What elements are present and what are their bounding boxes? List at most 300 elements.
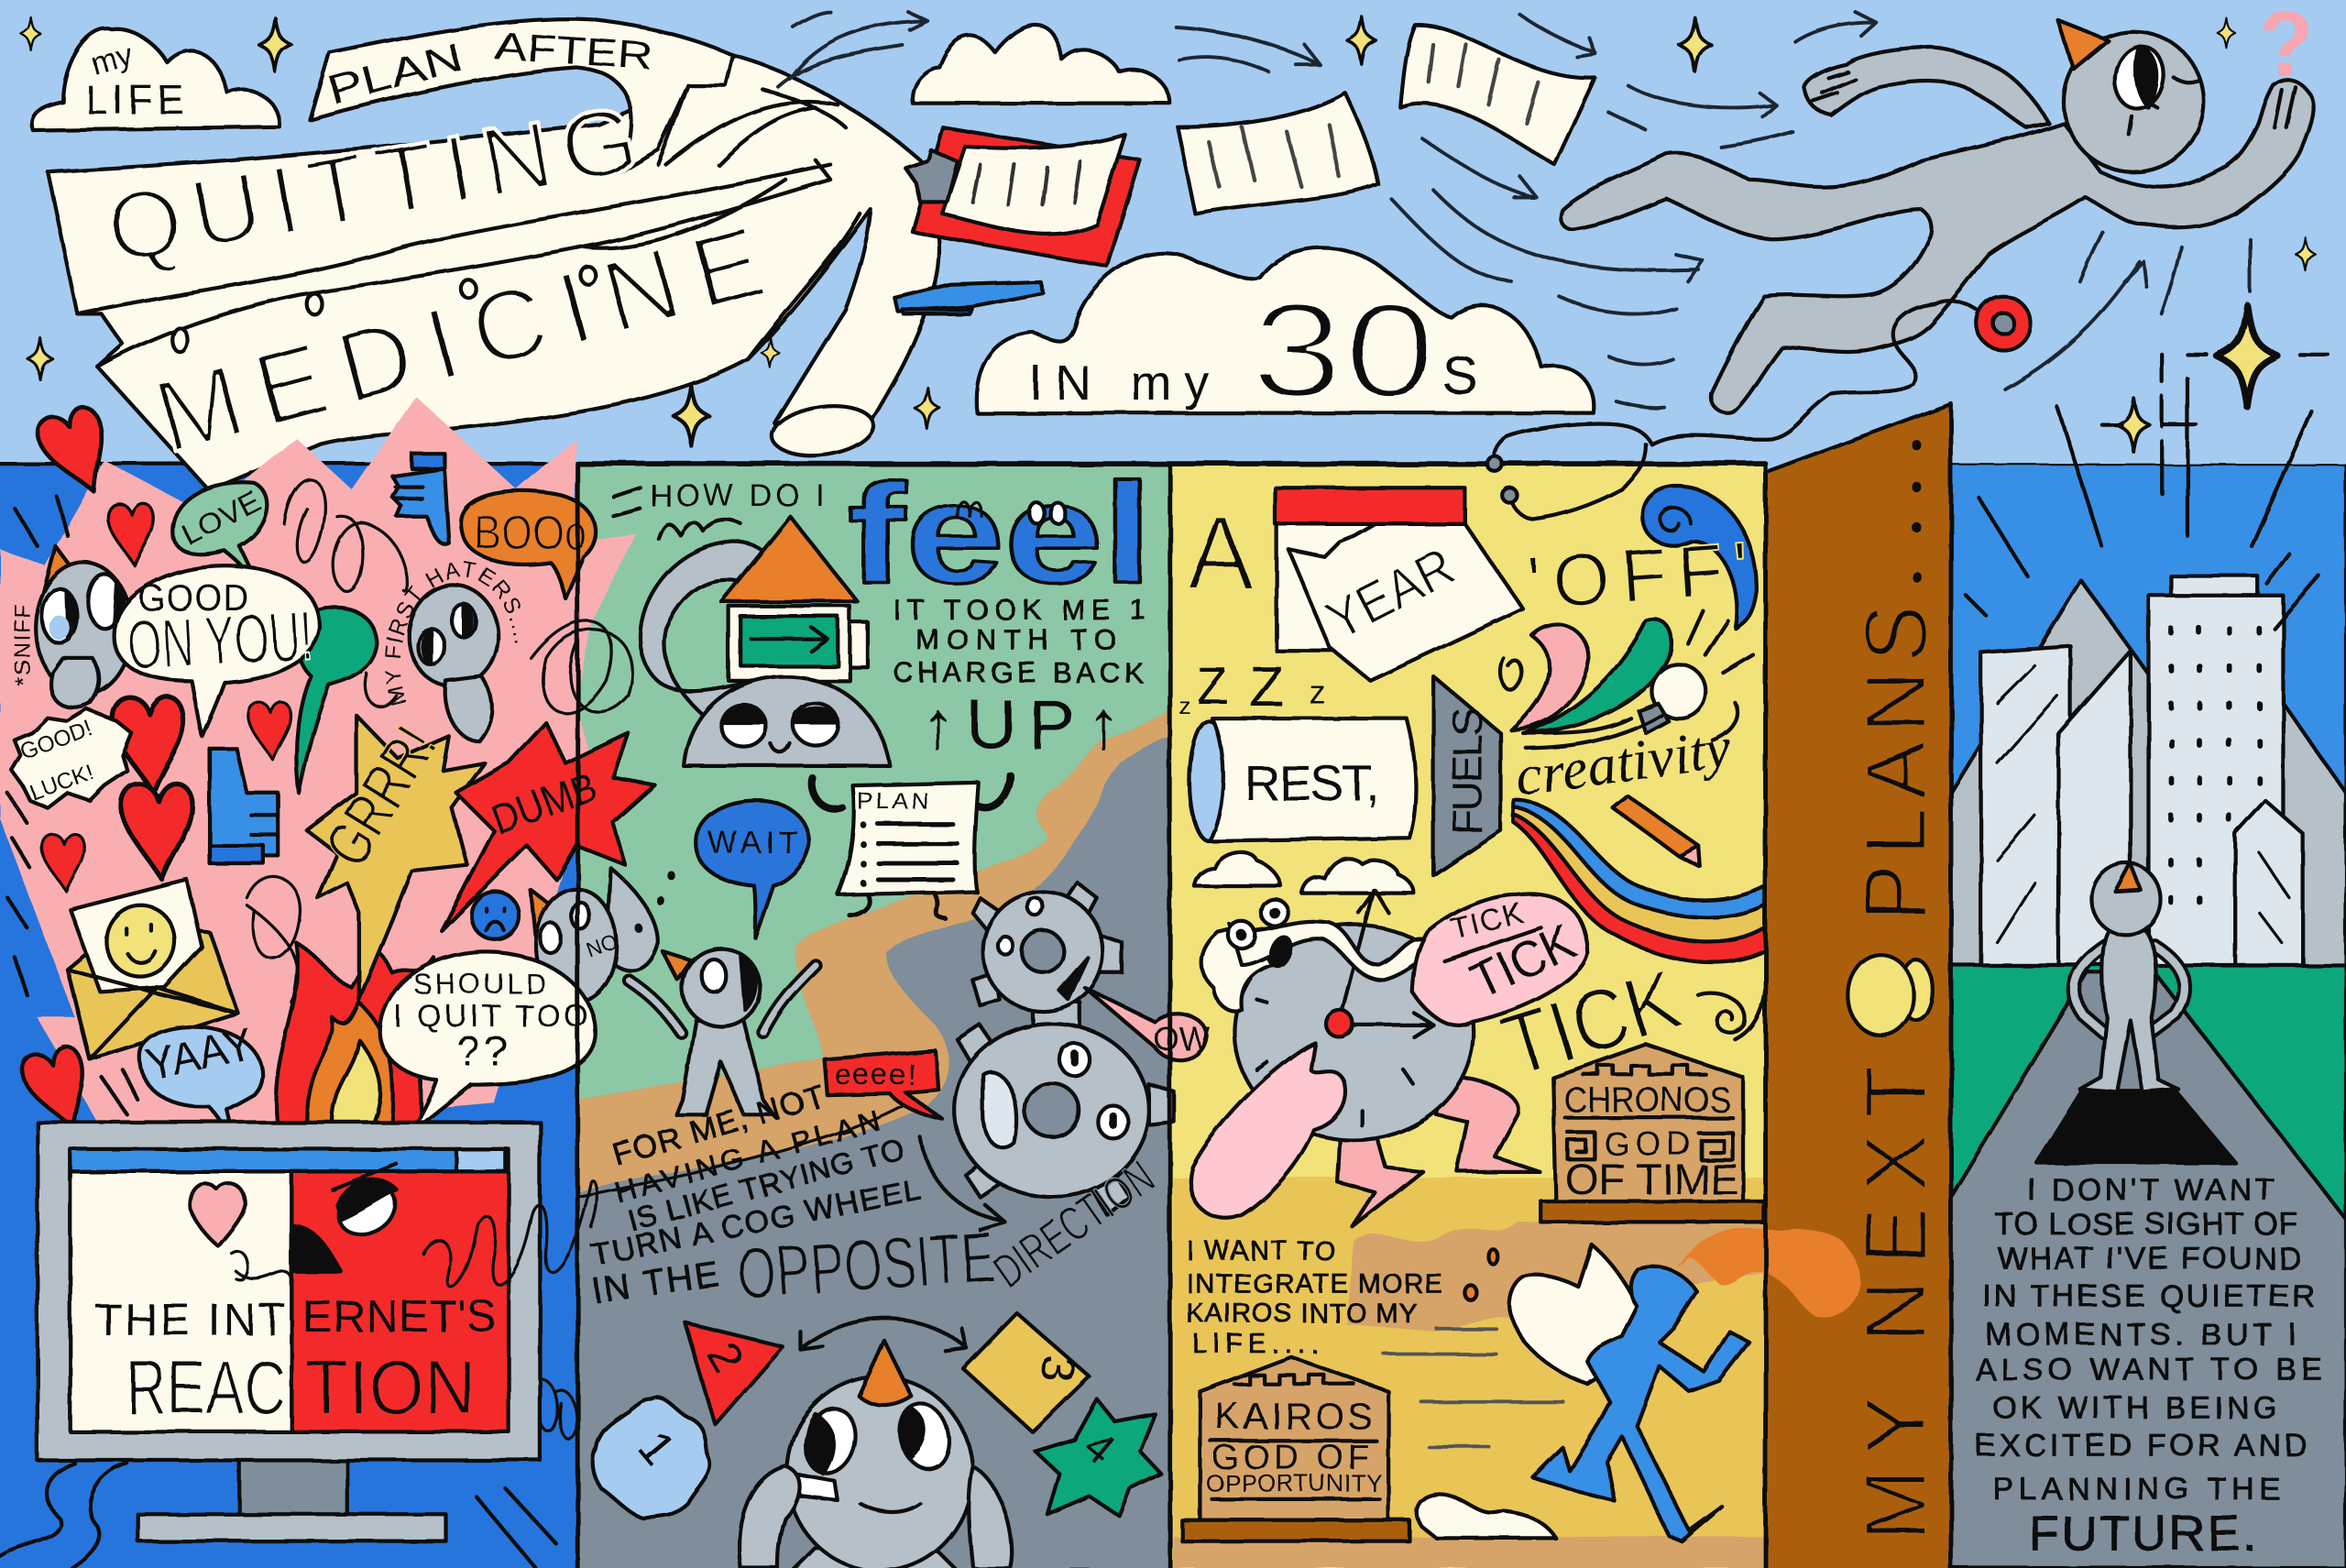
- tombstone: chronos: [1541, 1045, 1764, 1223]
- small cog: [972, 883, 1122, 1033]
- black shadow: [2036, 1091, 2235, 1163]
- eye: [2110, 43, 2168, 113]
- mouth: [740, 955, 756, 1010]
- scribble spirals: [247, 479, 632, 1439]
- cone: [859, 1341, 911, 1405]
- body: [1532, 1266, 1749, 1541]
- tick two: TICK: [1462, 913, 1584, 1009]
- pupils: [1074, 1053, 1113, 1125]
- feel second eye set: [1029, 503, 1065, 523]
- tick swirl: [1698, 988, 1766, 1040]
- eye: [1059, 1043, 1090, 1076]
- mouth: [1059, 958, 1088, 1000]
- eye left: [418, 629, 444, 664]
- no figure: NO: [583, 928, 620, 962]
- tube: [1494, 301, 1977, 520]
- pupil: [2136, 47, 2157, 108]
- the int: THE INT: [94, 1295, 286, 1344]
- the letter A: A: [1188, 496, 1254, 612]
- grrr star: [307, 714, 485, 1000]
- flying figure: [1561, 21, 2313, 413]
- body and legs: [1561, 80, 2313, 413]
- text: future note: OK WITH BEING: [1993, 1391, 2277, 1426]
- thumbs up: [210, 748, 279, 863]
- envelope back: [67, 920, 238, 1059]
- divider: [1444, 927, 1541, 960]
- pink heart: [190, 1183, 246, 1246]
- monitor shell: [38, 1122, 540, 1460]
- tall building: [2148, 596, 2283, 967]
- dirt pebbles: [1464, 1249, 1497, 1300]
- text: future note: I DON'T WANT: [2027, 1172, 2275, 1207]
- calendar: [1275, 488, 1523, 681]
- kairos: KAIROS: [1215, 1395, 1372, 1437]
- clock hand right: [1339, 1013, 1433, 1036]
- speech bubble: should I quit too: SHOULD: [413, 968, 548, 1000]
- battery shell: [729, 606, 850, 681]
- blue swirl: [1643, 486, 1757, 629]
- wings: [1509, 1245, 1644, 1384]
- thought dots: [639, 875, 672, 929]
- right pupil: [901, 1409, 925, 1459]
- fuels block: [1433, 676, 1501, 875]
- fire: [276, 943, 433, 1122]
- pink reaction burst: [0, 397, 636, 1122]
- kairos text: I WANT TO: [1187, 1236, 1336, 1266]
- plan word: PLAN: [858, 787, 932, 815]
- divider: [1211, 1441, 1379, 1499]
- meander: [1583, 1065, 1705, 1074]
- eye right: [893, 1398, 957, 1475]
- cog wheel text: OPPOSITE: [735, 1216, 997, 1314]
- speech bubble: love: [173, 483, 268, 587]
- tick tick hand: [1412, 894, 1587, 1025]
- diamond three: [963, 1313, 1090, 1431]
- smile: [2129, 78, 2199, 135]
- 30: 30: [1251, 276, 1436, 426]
- opportunity: OPPORTUNITY: [1206, 1470, 1383, 1497]
- panel: a year off: [1170, 464, 1766, 1568]
- chronos: CHRONOS: [1563, 1080, 1731, 1120]
- body: [955, 1024, 1149, 1197]
- horizon line: [577, 462, 1766, 466]
- speech bubble: should I quit too: ??: [456, 1027, 512, 1074]
- body: [2079, 930, 2178, 1092]
- big cog: [955, 1024, 1175, 1215]
- smile face: [106, 905, 175, 977]
- paper: [838, 783, 979, 894]
- sad blue face: [471, 892, 520, 939]
- text: future note: IN THESE QUIETER: [1982, 1278, 2315, 1313]
- eye two: [1098, 1106, 1128, 1138]
- rest scroll: [1189, 718, 1416, 841]
- my: my: [87, 38, 137, 82]
- light sky above horizon: [1951, 404, 2346, 464]
- speech bubble: yaay: YAAY: [141, 1019, 258, 1091]
- hand: [445, 676, 491, 740]
- good luck burst: GOOD!: [17, 717, 96, 765]
- body: [793, 1549, 958, 1568]
- kairos text: [1187, 1236, 1444, 1359]
- loose paper one: [1178, 93, 1378, 214]
- cog wheel text: DIRECTION: [984, 1150, 1164, 1299]
- pencil: [1613, 796, 1700, 866]
- plan after banner: [310, 19, 733, 172]
- cone hat: [2059, 21, 2108, 69]
- left building: [1981, 646, 2071, 965]
- eyes: [998, 898, 1043, 955]
- envelope with smile: [67, 880, 238, 1059]
- future figure: [2074, 863, 2185, 1092]
- kairos text: INTEGRATE MORE: [1187, 1269, 1444, 1299]
- cog wheel text: HAVING A PLAN: [610, 1102, 883, 1209]
- legs: [850, 894, 946, 918]
- blue sky water: [1951, 464, 2346, 1062]
- fuels block: FUELS: [1443, 707, 1490, 835]
- teeth: [972, 883, 1122, 1033]
- panel: internet reaction background: [0, 464, 577, 1568]
- eye right: [452, 605, 476, 638]
- tall building roof: [2171, 576, 2258, 597]
- thumbs down: [392, 454, 449, 544]
- red top: [1275, 488, 1464, 523]
- star four: [1036, 1399, 1161, 1516]
- dumb burst: [442, 723, 655, 930]
- hub: [1022, 930, 1064, 972]
- eye lids: [721, 708, 838, 723]
- red band: [1514, 816, 1766, 962]
- text: future note: [1975, 1172, 2322, 1561]
- clipboard: [905, 127, 1140, 267]
- text: future note: TO LOSE SIGHT OF: [1994, 1207, 2298, 1242]
- smile: [861, 1504, 920, 1512]
- tan floor: [1173, 1537, 1764, 1568]
- green upper field: [577, 464, 1170, 1100]
- how do I text: [613, 478, 826, 539]
- teeth: [958, 1025, 1175, 1215]
- list bars: [878, 825, 958, 880]
- rays: [1526, 610, 1753, 748]
- wind arrows: [778, 12, 2251, 408]
- cone: [663, 951, 691, 980]
- dome head: [684, 676, 890, 766]
- speech bubble: yaay: [139, 1019, 263, 1147]
- speech bubble: love: LOVE: [176, 484, 266, 552]
- text: future note: PLANNING THE: [1993, 1472, 2280, 1507]
- door: [1766, 404, 1951, 1568]
- sun rays: [1966, 378, 2319, 629]
- big tick: TICK: [1491, 950, 1692, 1096]
- text: quitting: QUITTING: [99, 85, 645, 284]
- tion: TION: [305, 1343, 476, 1431]
- cloud: my life: [32, 29, 280, 130]
- sleep z letters: [1179, 656, 1326, 719]
- knob base: [1900, 960, 1933, 1020]
- yellow band: [1514, 808, 1766, 942]
- list lines: [861, 825, 865, 883]
- clock face: [1234, 925, 1474, 1140]
- smile: [771, 743, 790, 752]
- pink arm: [1190, 1043, 1345, 1218]
- speech bubble: should I quit too: I QUIT TOO: [393, 999, 588, 1034]
- arm fill: [629, 965, 816, 1033]
- life: LIFE: [85, 78, 189, 123]
- cog wheel text: TURN A COG WHEEL: [588, 1172, 924, 1273]
- curved arrow: [920, 1137, 1005, 1230]
- door panel: [1766, 404, 1951, 1568]
- red hub: [1326, 1010, 1353, 1036]
- envelope front: [67, 970, 238, 1059]
- swap arrow: [800, 1319, 967, 1351]
- pupils: [1242, 913, 1275, 936]
- roof: [721, 516, 858, 601]
- cloud shape: [32, 29, 280, 130]
- hand right: [969, 1466, 1012, 1568]
- pink blob: [1412, 894, 1587, 1025]
- back arm: [1804, 48, 2048, 127]
- grey centre: [1993, 313, 2014, 334]
- wavy beard: [1230, 922, 1457, 980]
- grey road: [1951, 972, 2346, 1568]
- teeth mouth: [983, 1071, 1017, 1148]
- eye left: [42, 589, 78, 643]
- colour comma shapes: [1501, 620, 1671, 733]
- cone: [2116, 863, 2141, 892]
- speech bubble: good on you: ON YOU!: [126, 597, 314, 684]
- hand: [51, 658, 99, 707]
- sniff: *SNIFF: [11, 603, 36, 685]
- paper: [943, 135, 1125, 234]
- eye left: [799, 1403, 862, 1479]
- cloud: in my 30s: [976, 247, 1594, 426]
- speech bubble: ow: [1085, 988, 1211, 1060]
- good luck burst: [12, 709, 132, 808]
- grey arm: [640, 542, 778, 715]
- door text: plans: PLANS: [1847, 605, 1945, 922]
- eye right: [88, 575, 121, 629]
- text: future note: FUTURE.: [2029, 1506, 2256, 1561]
- rest: REST,: [1244, 756, 1379, 811]
- stone: [1553, 1045, 1743, 1204]
- board: [913, 127, 1140, 267]
- kairos text: KAIROS INTO MY: [1187, 1299, 1419, 1329]
- triangle two: [685, 1322, 783, 1424]
- how do I text: HOW DO I: [650, 478, 826, 513]
- god of: GOD OF: [1211, 1438, 1369, 1476]
- clock hand up: [1339, 890, 1388, 1022]
- cuff: [769, 400, 877, 462]
- cog wheel text: [588, 1079, 1164, 1314]
- dust cloud: [1417, 1495, 1556, 1538]
- quitting banner edge: [78, 165, 830, 314]
- charge text: ↑UP↑: [920, 685, 1122, 762]
- three: 3: [1029, 1353, 1085, 1384]
- smile marks: [126, 925, 156, 963]
- angry eye: [329, 1173, 404, 1245]
- panel: future city background: [1951, 378, 2346, 1568]
- lightbulb: [1526, 610, 1753, 748]
- sleep z letters: z: [1179, 692, 1191, 719]
- flame hair: [1674, 1228, 1860, 1318]
- blue band: [1514, 800, 1766, 918]
- curved caption: MY FIRST HATERS....: [385, 561, 521, 706]
- one: 1: [628, 1421, 685, 1475]
- divider: [1565, 1116, 1733, 1119]
- arms fill: [2074, 946, 2185, 1033]
- speed lines: [1384, 1329, 1563, 1447]
- page: [1277, 523, 1423, 651]
- head: [787, 1376, 972, 1568]
- arms: [629, 965, 816, 1033]
- small clouds: [1194, 852, 1414, 894]
- pink leg one: [1436, 1077, 1540, 1171]
- tan dirt band: [1346, 1223, 1764, 1332]
- year: YEAR: [1318, 537, 1464, 651]
- arms: [812, 775, 1010, 809]
- eeee bubble: [825, 1050, 943, 1119]
- dots: [1913, 444, 1919, 577]
- charge text: CHARGE BACK: [893, 656, 1145, 688]
- green balloon: [295, 608, 377, 793]
- left pupil: [807, 1414, 833, 1474]
- window dots: [2171, 629, 2259, 902]
- left end: [1189, 721, 1228, 841]
- grey mountains: [1951, 580, 2346, 972]
- feel lettering: feel: [847, 454, 1152, 612]
- tick one: TICK: [1448, 895, 1528, 946]
- grey lower ground: [577, 464, 1170, 1568]
- grrr star: GRRR!: [311, 714, 450, 878]
- tick marks: [1256, 943, 1421, 1125]
- head: [682, 948, 760, 1026]
- speech bubble: should I quit too: [380, 951, 596, 1133]
- text: future note: MOMENTS. BUT I: [1986, 1318, 2297, 1353]
- worried figure: [740, 1341, 1012, 1568]
- fold lines: [584, 85, 845, 248]
- stethoscope: [1487, 296, 2031, 520]
- door text: my next: MY NEXT: [1847, 1065, 1945, 1541]
- text: plan: PLAN: [323, 35, 467, 114]
- pupils: [67, 580, 123, 641]
- speed lines left: [7, 497, 137, 1114]
- body: [983, 892, 1102, 1012]
- panel: how do I feel: [577, 464, 1170, 1568]
- god: GOD: [1604, 1124, 1691, 1162]
- speech bubble: ow: OW: [1154, 1020, 1211, 1058]
- cog wheel text: IN THE: [589, 1255, 721, 1311]
- rainbow ribbon: [1514, 800, 1766, 962]
- four: 4: [1074, 1421, 1124, 1475]
- cog wheel text: FOR ME, NOT: [608, 1079, 828, 1173]
- sparkle stars: [20, 16, 2328, 494]
- red chest piece: [1977, 296, 2031, 350]
- numbered shapes: [593, 1313, 1161, 1519]
- centre wedge building: [2059, 651, 2131, 965]
- loose paper two: [1400, 26, 1595, 165]
- dumb burst: DUMB: [486, 762, 603, 843]
- torn paper: [1288, 523, 1523, 681]
- yellow background: [1170, 464, 1766, 1568]
- knob: [1847, 955, 1913, 1036]
- ernet's: ERNET'S: [302, 1292, 497, 1342]
- sleep z letters: z: [1310, 673, 1326, 710]
- small waving figure: [629, 948, 816, 1114]
- speech bubble: wait: [696, 800, 809, 938]
- white hair: [1201, 925, 1272, 1011]
- base shadow lines: [476, 1488, 556, 1568]
- ear piece two: [1502, 488, 1518, 503]
- no figure: [532, 868, 658, 1003]
- hand left: [740, 1466, 800, 1568]
- sky background: [0, 0, 2346, 466]
- glyph boxes: [1568, 1133, 1733, 1159]
- chronos clock character: [1190, 890, 1540, 1227]
- of time: OF TIME: [1565, 1156, 1738, 1204]
- monitor base: [137, 1514, 446, 1541]
- eye left: [721, 705, 766, 747]
- medicine banner edge: [97, 160, 861, 367]
- bulb: [1651, 664, 1705, 718]
- hub: [1025, 1083, 1079, 1137]
- monitor stand: [239, 1459, 347, 1519]
- tears: [49, 617, 71, 641]
- paper: [71, 880, 202, 992]
- kairos winged runner: [1384, 1228, 1860, 1541]
- crying figure: [11, 546, 132, 707]
- charge text: MONTH TO: [915, 624, 1118, 656]
- flower one: [593, 1398, 710, 1519]
- battery house figure: [640, 516, 890, 766]
- monitor: [0, 1122, 597, 1568]
- speech bubble: good on you: [114, 565, 320, 736]
- good luck burst: LUCK!: [27, 760, 97, 806]
- in my: IN my: [1029, 356, 1209, 411]
- eye right: [793, 703, 838, 745]
- hearts: [18, 403, 291, 1137]
- speech bubble: wait: WAIT: [707, 826, 797, 861]
- text: future note: ALSO WANT TO BE: [1975, 1352, 2322, 1387]
- head: [2063, 31, 2204, 172]
- meander: [1234, 1375, 1354, 1384]
- clip: [905, 149, 958, 202]
- cone: [42, 546, 78, 598]
- sleep z letters: Z: [1197, 657, 1228, 714]
- speech bubble: boo: [461, 491, 596, 598]
- eye two: [1228, 922, 1255, 948]
- bulb base: [1639, 703, 1668, 733]
- two: 2: [697, 1334, 752, 1381]
- off lettering: 'OFF': [1524, 527, 1751, 625]
- screen left: [71, 1171, 291, 1431]
- glass reflections: [1998, 666, 2289, 943]
- mouth: [1267, 935, 1294, 969]
- heart tail and coils: [232, 1180, 597, 1287]
- right small building: [2235, 800, 2303, 965]
- text: future note: EXCITED FOR AND: [1975, 1429, 2308, 1464]
- pink comma: [1511, 625, 1589, 730]
- my first haters figure: [385, 561, 521, 744]
- panel divider lines: [577, 404, 1951, 1568]
- arrow: [751, 627, 828, 651]
- stone: [1200, 1357, 1388, 1520]
- charge text: IT TOOK ME 1: [893, 594, 1147, 626]
- reac: REAC: [126, 1343, 286, 1431]
- eye one: [1261, 899, 1288, 927]
- coat sleeve and body: [48, 55, 939, 491]
- title coat and banners: [48, 19, 939, 491]
- cloud shape: [976, 247, 1594, 413]
- tombstone: kairos: [1182, 1357, 1409, 1541]
